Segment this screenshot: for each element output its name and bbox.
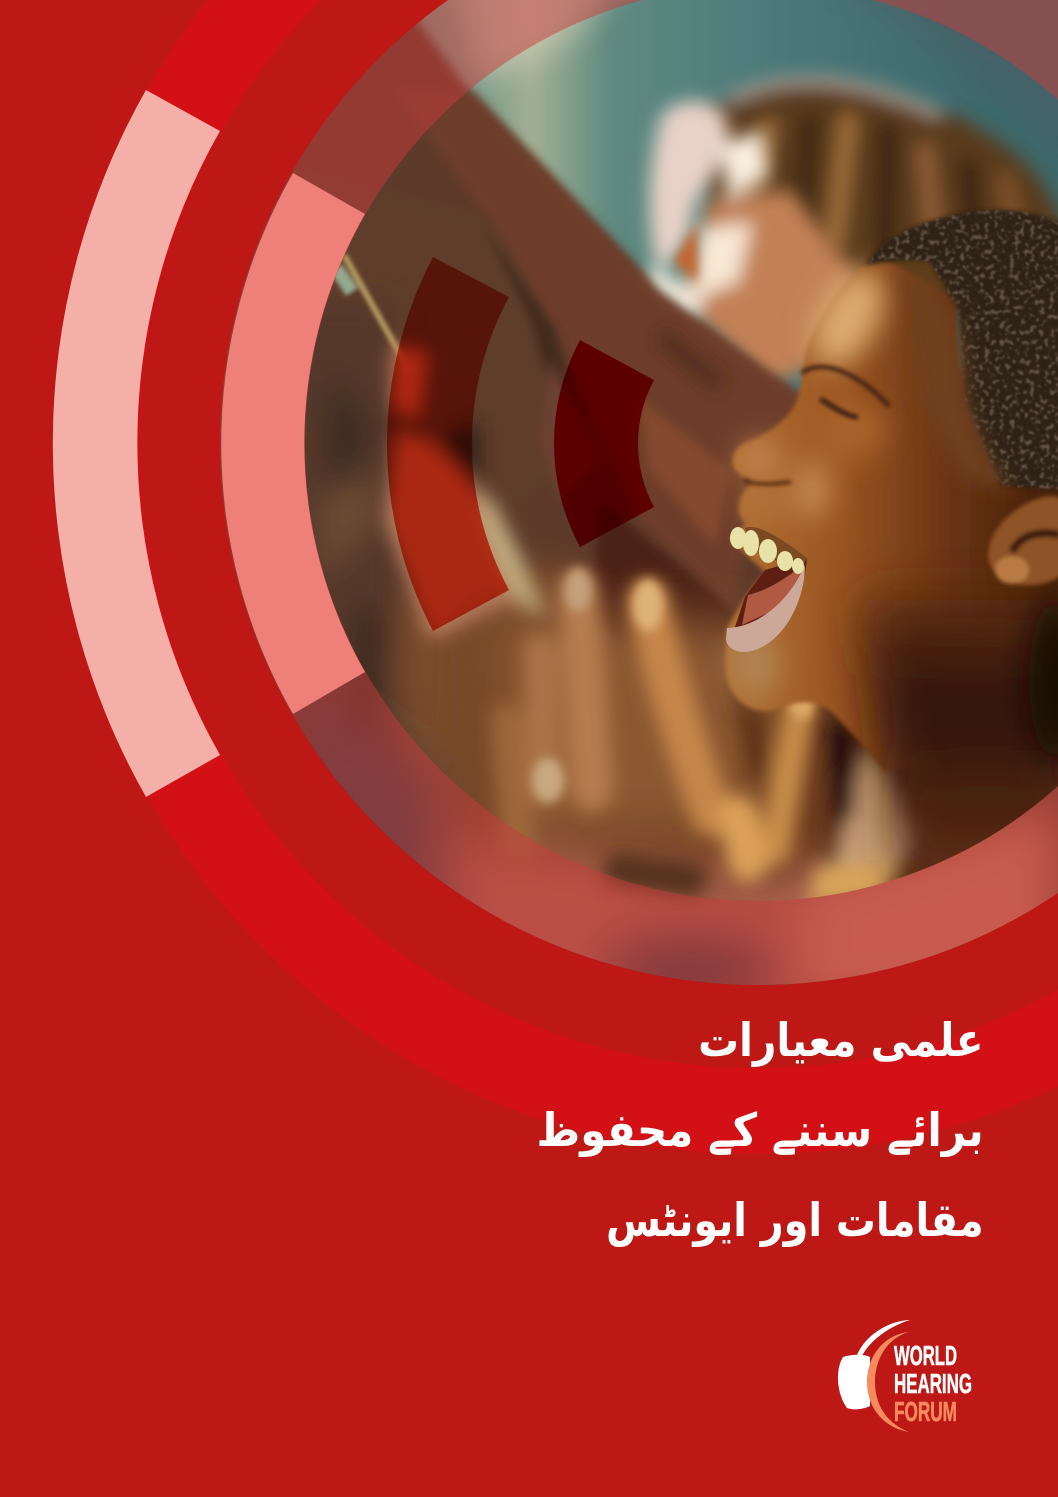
dark band between rings: [139, 0, 1058, 1068]
blurred man: hair: [690, 79, 1058, 340]
logo text: HEARING: [894, 1368, 972, 1399]
light pink outer arc: [53, 90, 220, 797]
title: [537, 1013, 984, 1247]
woman: open mouth: [726, 527, 807, 652]
skin patch behind sound wedge: [385, 345, 550, 640]
teal stage background: [380, 0, 1058, 400]
bright red outer ring: [54, 0, 1058, 1154]
woman: brow and eye: [745, 367, 888, 484]
title: مقامات اور ایونٹس: [606, 1193, 984, 1247]
title: علمی معیارات: [699, 1013, 984, 1067]
sound wedge: outer: [387, 257, 509, 631]
photo base tones: [200, 0, 1058, 1020]
arm tattoo shading: [660, 335, 720, 385]
woman: jaw and neck shadow: [860, 600, 1058, 860]
photo: laughing woman in a crowd: [200, 0, 1058, 1020]
translucent photo ring tint: [220, 0, 1058, 985]
woman: ear: [988, 496, 1058, 585]
lower crowd and hands base: [300, 620, 1058, 1010]
woman: face shading: [731, 258, 899, 699]
light streaks left of photo: [336, 255, 410, 372]
logo text: WORLD: [894, 1340, 957, 1371]
title: برائے سننے کے محفوظ: [537, 1103, 984, 1157]
logo icon: headphone: [838, 1320, 910, 1432]
shoulder and left crowd: [494, 242, 594, 490]
blurred man: face and hand: [645, 101, 860, 385]
coral inner arc: [221, 173, 365, 714]
woman: neck and chest: [802, 712, 1030, 898]
sound wedge: inner: [554, 340, 654, 547]
logo text: FORUM: [894, 1396, 957, 1427]
blurred hands and fingers: [508, 590, 800, 880]
woman: hair: [865, 210, 1058, 495]
woman: teeth: [730, 527, 804, 574]
logo text: [894, 1340, 972, 1427]
logo: World Hearing Forum: [838, 1320, 972, 1432]
blurred man: mouth shadow: [674, 222, 697, 282]
raised arm: [426, 86, 800, 632]
woman: neck, chest and face, inside inner circle: [720, 252, 1058, 898]
woman: face: [726, 255, 1058, 770]
